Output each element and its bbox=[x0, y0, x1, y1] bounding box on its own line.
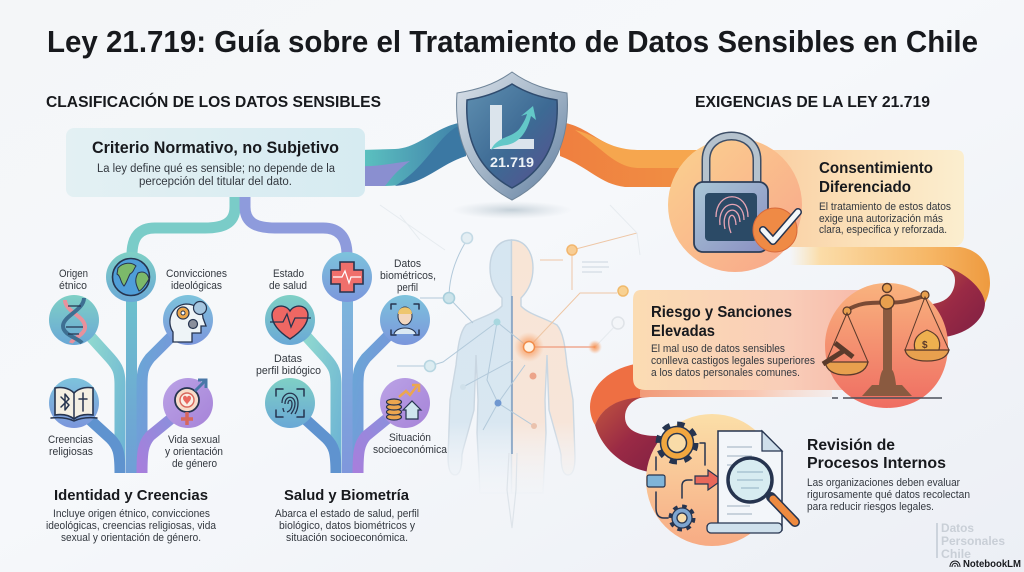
icon: face scan bbox=[380, 295, 430, 345]
text: riesgo description: conlleva castigos legales superiores bbox=[651, 355, 815, 367]
labels: identidad: Origen bbox=[59, 268, 88, 280]
text: salud y biometría: Salud y Biometría bbox=[284, 487, 410, 504]
body: blue half bbox=[448, 240, 512, 493]
node: shield emblem 21.719 bbox=[452, 72, 572, 219]
watermark: datos personales chile: Datos bbox=[941, 521, 974, 535]
icon: scales with gavel and money: $ bbox=[922, 340, 928, 351]
labels: salud: perfil bbox=[397, 282, 418, 294]
heading: consentimiento: Consentimiento bbox=[819, 160, 933, 177]
heading: revisión: Revisión de bbox=[807, 437, 895, 454]
ribbon: left, shield to criterion box bbox=[360, 122, 466, 186]
panel: criterio normativo bbox=[66, 128, 365, 197]
text: riesgo description: a los datos personales comunes. bbox=[651, 367, 800, 379]
labels: identidad bbox=[48, 268, 227, 470]
text: identidad y creencias: sexual y orientación de género. bbox=[61, 532, 201, 544]
icon: gender symbols bbox=[163, 378, 213, 428]
connector: tree branches from criterion box bbox=[132, 197, 347, 262]
text: revisión description: rigurosamente qué datos recolectan bbox=[807, 489, 970, 501]
text: identidad y creencias: ideológicas, creencias religiosas, vida bbox=[46, 520, 217, 532]
watermark: datos personales chile: Chile bbox=[941, 547, 971, 561]
text: revisión description: para reducir riesgos legales. bbox=[807, 501, 934, 513]
text: riesgo description bbox=[651, 343, 815, 379]
icon: head with gears bbox=[163, 295, 213, 345]
icon: coins, house and trend bbox=[380, 378, 430, 428]
labels: identidad: Vida sexual bbox=[168, 434, 220, 446]
watermark: datos personales chile bbox=[936, 521, 1005, 561]
labels: salud: perfil bidógico bbox=[256, 365, 321, 377]
tree trunk and branches bbox=[304, 290, 388, 473]
labels: salud: Estado bbox=[273, 268, 304, 280]
network nodes bbox=[424, 232, 628, 429]
heading: criterio: Criterio Normativo, no Subjetivo bbox=[92, 138, 339, 157]
icon: dna bbox=[49, 295, 99, 345]
icon: religious book bbox=[49, 378, 99, 428]
ribbon: right, shield to consent bbox=[560, 122, 700, 187]
text: identidad y creencias: Identidad y Creencias bbox=[54, 487, 208, 504]
text: salud y biometría: biológico, datos biométricos y bbox=[279, 520, 415, 532]
text: riesgo description: El mal uso de datos sensibles bbox=[651, 343, 785, 355]
labels: salud: de salud bbox=[269, 280, 307, 292]
node: shield emblem 21.719: 21.719 bbox=[490, 154, 534, 170]
labels: salud: biométricos, bbox=[380, 270, 436, 282]
banner bbox=[735, 150, 964, 247]
icon: process and document review bbox=[646, 414, 795, 546]
text: salud y biometría: situación socioeconómica. bbox=[286, 532, 408, 544]
text: salud y biometría bbox=[275, 487, 419, 544]
text: consentimiento description: exige una autorización más bbox=[819, 213, 943, 225]
text: criterio description: percepción del titular del dato. bbox=[139, 176, 292, 188]
figure: human body with data network bbox=[380, 205, 640, 528]
panel: revisión de procesos internos bbox=[646, 414, 970, 546]
panel: consentimiento diferenciado bbox=[668, 136, 964, 272]
icon: medical cross bbox=[322, 252, 372, 302]
labels: identidad: ideológicas bbox=[171, 280, 222, 292]
heading: exigencias: EXIGENCIAS DE LA LEY 21.719 bbox=[695, 94, 930, 111]
labels: identidad: étnico bbox=[59, 280, 87, 292]
labels: identidad: y orientación bbox=[165, 446, 223, 458]
heading: consentimiento bbox=[819, 160, 933, 196]
labels: identidad: de género bbox=[172, 458, 217, 470]
ribbon: risk to review bbox=[590, 362, 832, 472]
labels: identidad: Convicciones bbox=[166, 268, 227, 280]
text: identidad y creencias: Incluye origen étnico, convicciones bbox=[53, 508, 210, 520]
panel: riesgo y sanciones bbox=[633, 283, 949, 408]
heading: riesgo bbox=[651, 304, 792, 340]
tree: salud y biometría bbox=[256, 252, 448, 473]
labels: salud: Datas bbox=[274, 353, 302, 365]
body: orange half bbox=[512, 240, 575, 493]
icon: fingerprint bbox=[265, 378, 315, 428]
labels: identidad: Creencias bbox=[48, 434, 93, 446]
heading: clasificación: CLASIFICACIÓN DE LOS DATOS SENSIBLES bbox=[46, 92, 381, 111]
text: revisión description bbox=[807, 477, 970, 513]
heading: consentimiento: Diferenciado bbox=[819, 179, 911, 196]
watermark: datos personales chile: Personales bbox=[941, 534, 1005, 548]
text: criterio description: La ley define qué es sensible; no depende de la bbox=[97, 163, 336, 175]
text: salud y biometría: Abarca el estado de salud, perfil bbox=[275, 508, 419, 520]
icon: scales with gavel and money bbox=[823, 283, 949, 408]
heading: revisión bbox=[807, 437, 946, 472]
text: revisión description: Las organizaciones deben evaluar bbox=[807, 477, 960, 489]
icon: heart rate bbox=[265, 295, 315, 345]
labels: salud bbox=[256, 258, 448, 456]
network lines bbox=[380, 205, 640, 430]
icon: padlock with fingerprint bbox=[668, 136, 802, 272]
labels: salud: socioeconómica bbox=[373, 444, 448, 456]
heading: revisión: Procesos Internos bbox=[807, 455, 946, 472]
heading: riesgo: Riesgo y Sanciones bbox=[651, 304, 792, 321]
heading: riesgo: Elevadas bbox=[651, 323, 715, 340]
tree trunk and branches bbox=[88, 290, 172, 473]
text: identidad y creencias bbox=[46, 487, 217, 544]
text: consentimiento description bbox=[819, 201, 951, 236]
icon: globe bbox=[106, 252, 156, 302]
tree: identidad y creencias bbox=[48, 252, 227, 473]
title: Ley 21.719: Guía sobre el Tratamiento de Datos Sensibles en Chile bbox=[47, 24, 978, 59]
labels: salud: Datos bbox=[394, 258, 421, 270]
labels: identidad: religiosas bbox=[49, 446, 93, 458]
text: consentimiento description: clara, especifica y reforzada. bbox=[819, 224, 947, 236]
labels: salud: Situación bbox=[389, 432, 431, 444]
text: criterio description bbox=[97, 163, 336, 188]
text: consentimiento description: El tratamiento de estos datos bbox=[819, 201, 951, 213]
ribbon: consent to risk bbox=[790, 247, 990, 337]
banner bbox=[633, 290, 890, 390]
